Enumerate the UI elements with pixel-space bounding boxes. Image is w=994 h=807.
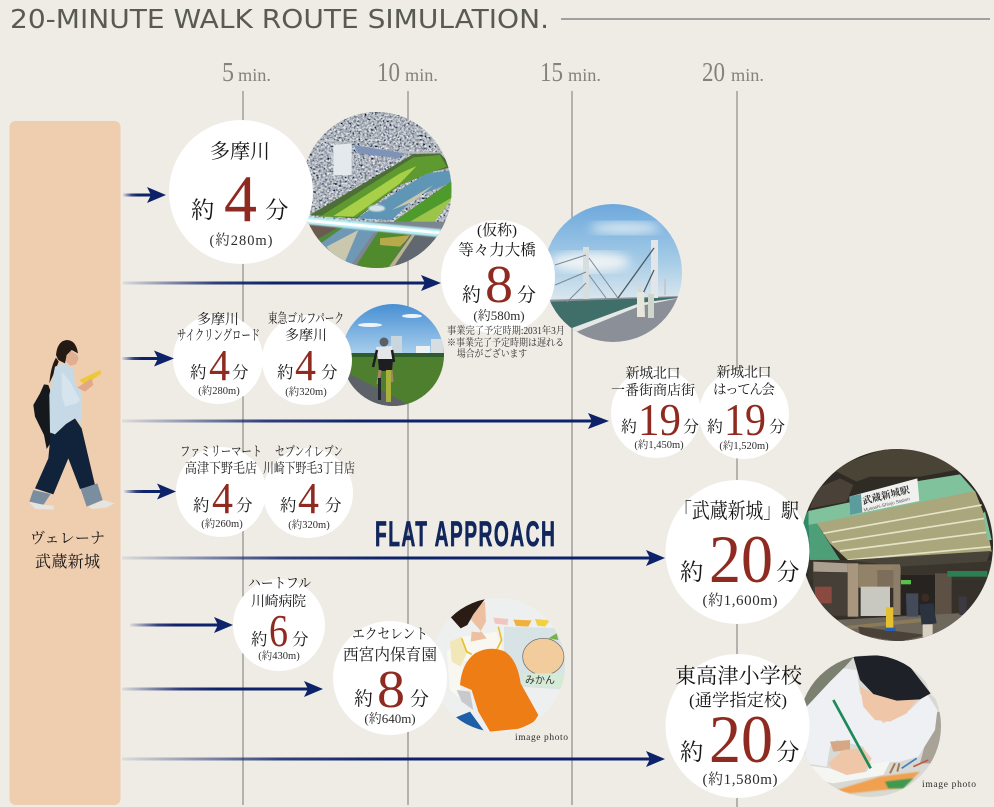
destination: Musashi-Shinjo station — [666, 480, 810, 624]
arrow: to bridge — [123, 275, 441, 291]
destination: Shinjo north Hatten-kai: (約1,520m) — [719, 439, 769, 452]
destination: Shinjo north shopping street: 一番街商店街 — [611, 382, 695, 399]
destination: Shinjo north shopping street: 約 — [621, 418, 637, 436]
time axis: 15 — [540, 57, 563, 87]
panel: start location — [10, 121, 120, 805]
destination: Shinjo north Hatten-kai: 新城北口 — [716, 364, 772, 381]
destination: Musashi-Shinjo station: (約1,600m) — [702, 592, 778, 609]
destination: Musashi-Shinjo station: 20 — [709, 521, 773, 597]
note: completion schedule: ※事業完了予定時期は遅れる — [447, 336, 564, 349]
destination: Excellent Nishimiyauchi nursery: 8 — [377, 661, 405, 719]
caption: image photo: image photo — [515, 733, 568, 743]
photo: Musashi-Shinjo station — [800, 445, 994, 648]
panel: start location: 武蔵新城 — [35, 553, 100, 571]
destination: Tokyu golf park — [262, 310, 352, 405]
photo: aerial view of Tama River — [300, 110, 457, 270]
destination: Shinjo north Hatten-kai: 19 — [724, 394, 766, 445]
destination: Heartful Kawasaki Hospital: 川崎病院 — [251, 593, 306, 610]
destination: Tokyu golf park: 東急ゴルフパーク — [268, 310, 344, 326]
photo: Todoroki bridge rendering — [548, 204, 682, 342]
destination: Tama River cycling road: 4 — [209, 341, 230, 390]
arrow: to Tama River — [123, 187, 166, 203]
photo: nursery school teacher and child: みかん — [525, 674, 555, 686]
destination: Seven-Eleven: (約320m) — [288, 518, 330, 531]
note: completion schedule: 事業完了予定時期:2031年3月 — [447, 324, 565, 337]
arrow: to nursery — [122, 681, 323, 697]
destination: Shinjo north Hatten-kai — [699, 364, 789, 459]
destination: Higashi-Takatsu elementary school: (約1,580m) — [702, 771, 778, 788]
destination: Excellent Nishimiyauchi nursery: 西宮内保育園 — [343, 646, 437, 664]
destination: Tama River: 分 — [265, 197, 288, 224]
destination: Shinjo north shopping street: 分 — [683, 418, 699, 436]
time axis: min. — [405, 65, 438, 85]
destination: Todoroki bridge: 等々力大橋 — [458, 241, 536, 259]
destination: Tokyu golf park: 4 — [295, 341, 316, 390]
destination: Todoroki bridge: 約 — [462, 284, 481, 306]
destination: Seven-Eleven: 4 — [298, 474, 319, 523]
destination: Tama River: 多摩川 — [210, 140, 270, 163]
destination: FamilyMart: 分 — [236, 496, 253, 515]
destination: Heartful Kawasaki Hospital — [233, 577, 325, 671]
person walking — [29, 340, 115, 510]
destination: Tama River cycling road — [173, 311, 263, 404]
time axis — [222, 57, 764, 807]
destination: Shinjo north shopping street: 新城北口 — [626, 365, 680, 382]
arrow: to school — [122, 751, 665, 767]
time axis: 5 — [222, 57, 234, 87]
destination: Tokyu golf park: 約 — [277, 363, 294, 382]
note: completion schedule: 場合がございます — [457, 347, 527, 360]
photo: Musashi-Shinjo station: Musashi-Shinjo Station — [863, 496, 911, 513]
arrow: to hospital — [130, 617, 233, 633]
destination: Seven-Eleven: 川崎下野毛3丁目店 — [263, 460, 355, 477]
arrow: to station — [122, 550, 665, 566]
destination: Tama River cycling road: (約280m) — [198, 384, 240, 397]
destination: Todoroki bridge: 8 — [485, 256, 513, 314]
destination: Seven-Eleven — [263, 444, 355, 538]
destination: Tokyu golf park: 分 — [321, 363, 338, 382]
destination: Seven-Eleven: セブンイレブン — [275, 444, 343, 459]
destination: Tokyu golf park: 多摩川 — [285, 327, 327, 344]
destination: Musashi-Shinjo station: 約 — [680, 559, 704, 586]
destination: FamilyMart: ファミリーマート — [180, 444, 262, 459]
flat approach label: FLAT APPROACH — [375, 514, 555, 553]
time axis: 20 — [702, 57, 725, 87]
destination: Todoroki bridge: (仮称) — [477, 222, 517, 239]
destination: Musashi-Shinjo station: 「武蔵新城」駅 — [674, 499, 799, 523]
destination: FamilyMart: 高津下野毛店 — [185, 460, 257, 477]
destination: Shinjo north Hatten-kai: 約 — [707, 418, 723, 436]
destination: Seven-Eleven: 分 — [325, 496, 342, 515]
destination: Shinjo north shopping street — [611, 365, 701, 458]
destination: Excellent Nishimiyauchi nursery: エクセレント — [352, 627, 428, 643]
photo: child drawing — [804, 655, 941, 797]
destination: Tama River cycling road: 分 — [232, 363, 249, 382]
note: completion schedule — [447, 324, 565, 360]
destination: Excellent Nishimiyauchi nursery: 分 — [410, 688, 429, 710]
destination: Shinjo north shopping street: (約1,450m) — [634, 438, 684, 451]
destination: FamilyMart — [176, 444, 266, 537]
destination: Excellent Nishimiyauchi nursery — [333, 621, 447, 735]
destination: Tama River cycling road: 約 — [190, 363, 206, 382]
caption: image photo: image photo — [922, 780, 976, 790]
destination: Tama River: (約280m) — [210, 232, 273, 249]
arrow: to shopping street — [122, 413, 609, 429]
destination: Higashi-Takatsu elementary school: (通学指定校) — [689, 691, 787, 710]
destination: Shinjo north shopping street: 19 — [638, 394, 681, 445]
destination: Heartful Kawasaki Hospital: 6 — [269, 606, 288, 656]
title: 20-MINUTE WALK ROUTE SIMULATION. — [10, 5, 549, 35]
destination: Seven-Eleven: 約 — [280, 496, 296, 515]
time axis: min. — [731, 65, 764, 85]
destination: Shinjo north Hatten-kai: 分 — [769, 418, 785, 436]
arrow: to cycling road — [122, 350, 174, 366]
destination: Tama River: 約 — [191, 197, 214, 224]
destination: Higashi-Takatsu elementary school: 東高津小学校 — [675, 664, 803, 688]
destination: Excellent Nishimiyauchi nursery: 約 — [354, 688, 373, 710]
destination: Shinjo north Hatten-kai: はってん会 — [713, 382, 776, 397]
destination: Heartful Kawasaki Hospital: (約430m) — [258, 649, 300, 662]
destination: Tama River — [169, 120, 313, 264]
destination: Todoroki bridge: 分 — [517, 284, 536, 306]
panel: start location: ヴェレーナ — [30, 530, 105, 547]
destination: Tama River cycling road: サイクリングロード — [177, 328, 260, 344]
destination: Todoroki bridge: (約580m) — [473, 308, 525, 323]
time axis: 10 — [377, 57, 400, 87]
destination: Musashi-Shinjo station: 分 — [776, 559, 800, 586]
destination: Tama River cycling road: 多摩川 — [197, 311, 239, 328]
destination: Tama River: 4 — [224, 162, 257, 236]
destination: Todoroki bridge — [441, 220, 565, 360]
destination: Tokyu golf park: (約320m) — [285, 385, 327, 398]
destination: Higashi-Takatsu elementary school: 分 — [776, 739, 800, 766]
destination: Heartful Kawasaki Hospital: 約 — [251, 630, 268, 649]
destination: FamilyMart: (約260m) — [201, 517, 243, 530]
time axis: min. — [238, 65, 271, 85]
destination: FamilyMart: 約 — [193, 496, 210, 515]
photo: nursery school teacher and child — [435, 598, 565, 732]
destination: Higashi-Takatsu elementary school: 20 — [709, 701, 773, 777]
photo: cyclist — [346, 304, 444, 406]
destination: FamilyMart: 4 — [212, 474, 233, 523]
destination: Higashi-Takatsu elementary school: 約 — [680, 739, 704, 766]
destination: Excellent Nishimiyauchi nursery: (約640m) — [364, 711, 416, 726]
destination: Heartful Kawasaki Hospital: ハートフル — [248, 577, 311, 592]
destination: Heartful Kawasaki Hospital: 分 — [292, 630, 309, 649]
destination: Higashi-Takatsu elementary school — [666, 654, 810, 798]
time axis: min. — [568, 65, 601, 85]
arrow: to convenience stores — [124, 484, 176, 500]
photo: Musashi-Shinjo station: 武蔵新城駅 — [861, 484, 911, 507]
